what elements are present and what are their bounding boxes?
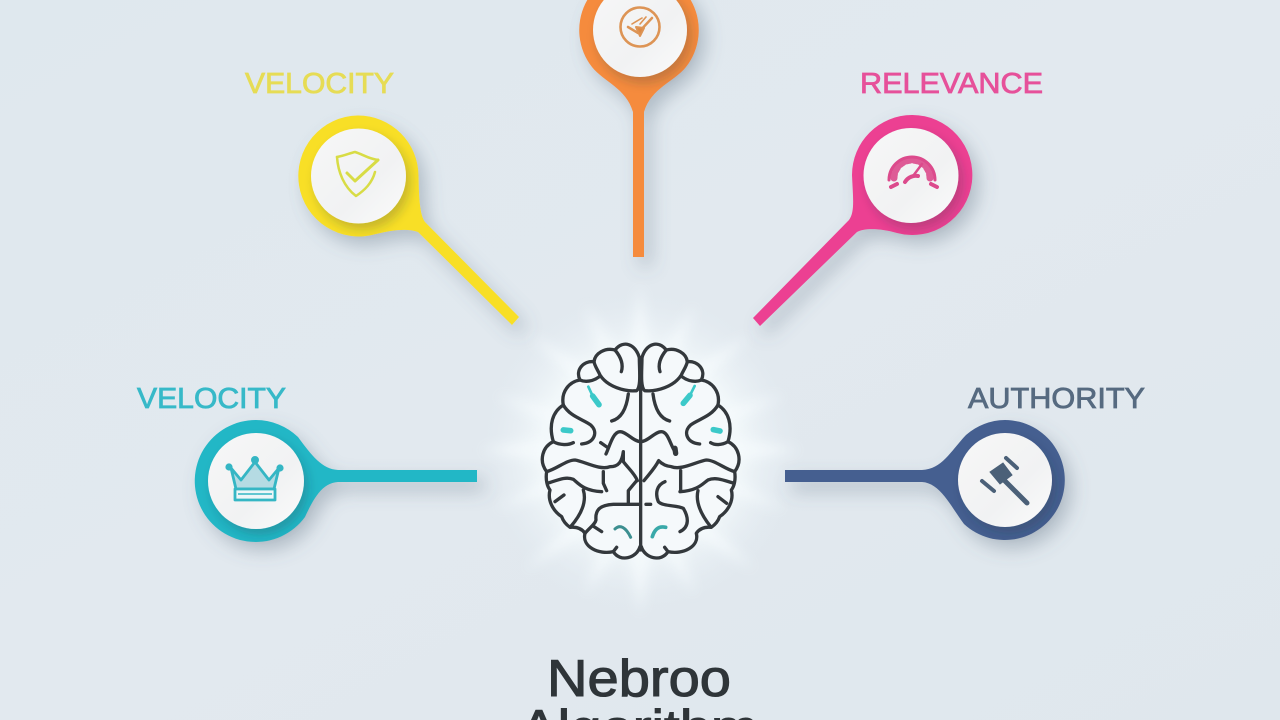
label: yellow velocity: VELOCITY <box>245 68 394 100</box>
brain fill <box>542 344 739 558</box>
orange pin body <box>579 0 699 257</box>
icon: shield check <box>337 152 378 196</box>
navy disc <box>958 433 1052 527</box>
pink pin body <box>753 115 972 326</box>
icon: check circle <box>620 8 660 46</box>
pink disc <box>864 128 958 223</box>
pin: yellow <box>298 115 519 325</box>
left hemisphere <box>542 344 641 558</box>
pin: pink <box>753 115 972 326</box>
title line 1: Nebroo <box>547 650 731 708</box>
teal pin body <box>195 420 477 542</box>
label: teal velocity: VELOCITY <box>137 383 286 415</box>
icon: crown <box>227 457 282 500</box>
yellow disc <box>311 128 406 224</box>
brain glow <box>475 285 805 615</box>
right hemisphere <box>641 344 739 558</box>
icon: gavel <box>982 458 1027 503</box>
yellow pin body <box>298 115 519 325</box>
teal highlights <box>563 386 720 537</box>
brain icon <box>542 344 739 558</box>
midline <box>636 387 646 550</box>
pin: teal <box>195 420 477 542</box>
orange disc <box>593 0 687 77</box>
navy pin body <box>785 420 1065 540</box>
label: navy authority: AUTHORITY <box>968 383 1145 415</box>
pin: navy <box>785 420 1065 540</box>
pin: orange <box>579 0 699 257</box>
icon: gauge <box>889 157 937 187</box>
label: pink relevance: RELEVANCE <box>860 68 1043 100</box>
teal disc <box>208 433 304 529</box>
title <box>520 650 758 720</box>
